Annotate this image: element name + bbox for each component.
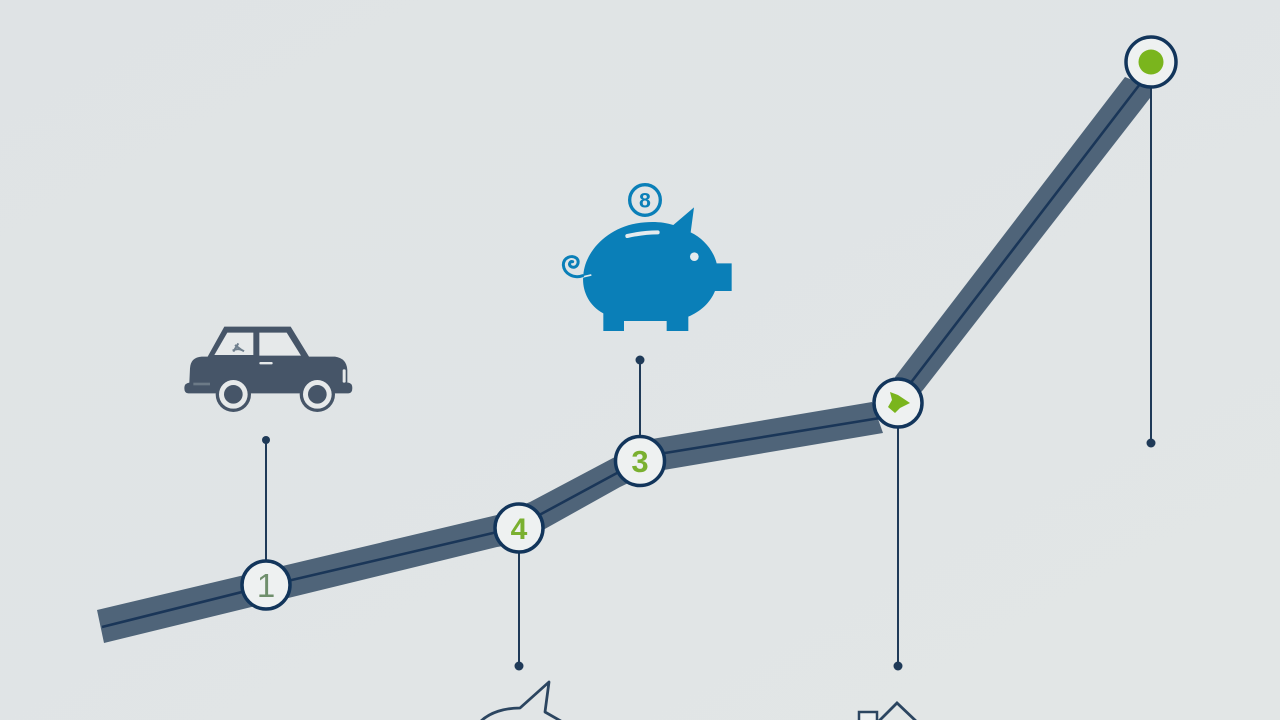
icon: car bbox=[184, 327, 352, 412]
milestone node 1 bbox=[242, 561, 290, 609]
connector: milestone 4 to house bbox=[894, 426, 902, 670]
icon: piggy bank with coin bbox=[563, 185, 732, 331]
milestone node 1: 1 bbox=[257, 567, 275, 604]
milestone node 4 bbox=[874, 379, 922, 427]
coin: 8 bbox=[639, 189, 651, 213]
icon: house (cropped) bbox=[859, 703, 917, 720]
milestone node 3 bbox=[616, 436, 664, 486]
milestone node 3: 3 bbox=[631, 444, 649, 479]
connector: milestone 2 to speech bubble bbox=[514, 552, 524, 670]
connector: milestone 1 to car bbox=[262, 436, 270, 562]
connector: milestone 3 to piggy bank bbox=[636, 356, 644, 438]
milestone node 2: 4 bbox=[511, 513, 528, 546]
icon: speech bubble (cropped) bbox=[480, 682, 566, 720]
connector: milestone 5 down bbox=[1146, 85, 1156, 448]
pig tail bbox=[563, 257, 583, 277]
milestone node 2 bbox=[495, 504, 543, 552]
coin bbox=[630, 185, 660, 215]
rising road path bbox=[97, 77, 1152, 643]
milestone node 5: goal bbox=[1126, 37, 1176, 87]
